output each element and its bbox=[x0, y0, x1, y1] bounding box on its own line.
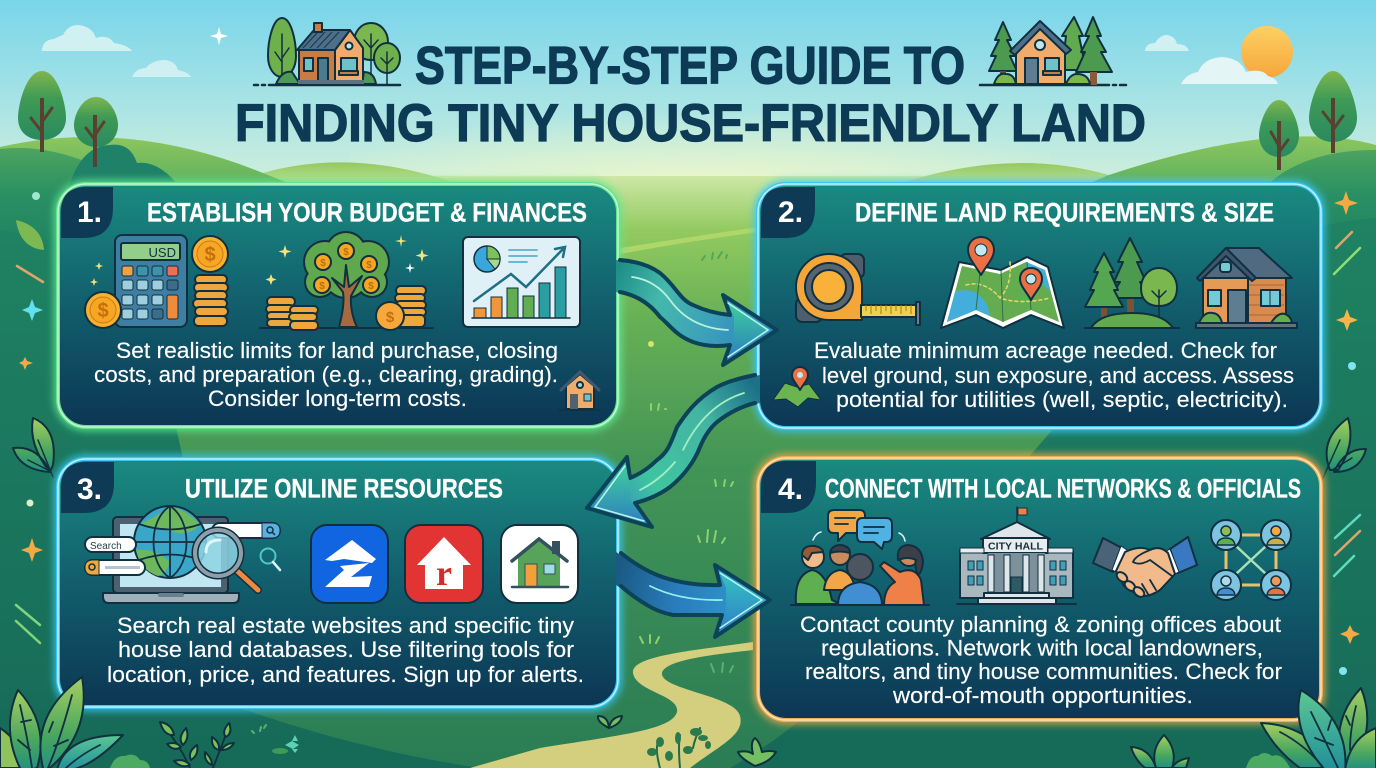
body text 2: Evaluate minimum acreage needed. Check for bbox=[814, 338, 1278, 363]
step number 1: 1. bbox=[77, 196, 102, 229]
body text 4 bbox=[800, 612, 1283, 708]
foliage: bottom sprigs bbox=[160, 722, 299, 768]
step number 2 bbox=[761, 187, 815, 238]
body text 3: house land databases. Use filtering tools for bbox=[118, 637, 575, 662]
grass tufts bbox=[640, 252, 733, 672]
icon: trees bbox=[1085, 238, 1179, 328]
icon: city hall: CITY HALL bbox=[988, 540, 1044, 552]
sun bbox=[1241, 26, 1293, 78]
icon: calculator and coins: $ bbox=[97, 300, 109, 322]
icon: handshake bbox=[1093, 537, 1197, 599]
icon: map with pins bbox=[941, 237, 1064, 328]
icon: city hall bbox=[957, 507, 1076, 604]
heading 3: UTILIZE ONLINE RESOURCES bbox=[185, 474, 503, 504]
icon: laptop search with globe bbox=[85, 506, 280, 603]
arrow: step 1 to step 2 bbox=[616, 260, 777, 365]
icon: laptop search with globe: Search bbox=[90, 541, 122, 552]
title: STEP-BY-STEP GUIDE TO bbox=[415, 36, 965, 96]
step number 1 bbox=[61, 187, 113, 238]
foliage: bottom centre-right plant and bush bbox=[1131, 735, 1290, 768]
arrow: step 3 to step 4 bbox=[616, 552, 770, 637]
icon: Zillow-style blue tile bbox=[311, 525, 388, 603]
panel 4: local networks bbox=[758, 458, 1321, 720]
side decorations left bbox=[13, 192, 54, 643]
icon: money tree: $ bbox=[343, 247, 349, 258]
heading 1: ESTABLISH YOUR BUDGET & FINANCES bbox=[147, 198, 587, 228]
title: FINDING TINY HOUSE-FRIENDLY LAND bbox=[235, 94, 1146, 153]
background: sky bbox=[0, 0, 1376, 190]
step number 3 bbox=[61, 462, 114, 513]
foliage: sprouts near path bbox=[598, 716, 776, 768]
icon: small house bbox=[559, 372, 600, 410]
foliage: bottom left leaves bbox=[0, 677, 150, 768]
body text 3 bbox=[107, 613, 584, 687]
title icon: tiny house with pines, right bbox=[980, 17, 1126, 85]
icon: calculator and coins bbox=[85, 235, 228, 328]
sparkle bbox=[210, 27, 228, 45]
title bbox=[235, 36, 1146, 153]
icon: calculator and coins: $ bbox=[204, 244, 216, 266]
step number 4 bbox=[761, 461, 816, 513]
icon: tape measure bbox=[796, 254, 920, 325]
winding path bbox=[470, 642, 753, 768]
title icon: tiny house with trees, left bbox=[254, 18, 400, 85]
panel 3: online resources bbox=[58, 459, 618, 707]
body text 2: potential for utilities (well, septic, electricity). bbox=[836, 387, 1288, 412]
icon: money tree: $ bbox=[366, 260, 372, 271]
left trees bbox=[18, 71, 118, 167]
icon: money tree: $ bbox=[320, 258, 326, 269]
body text 2: level ground, sun exposure, and access. Assess bbox=[822, 363, 1294, 388]
right trees bbox=[1259, 71, 1357, 170]
foliage: bottom right leaves bbox=[1261, 688, 1376, 768]
step number 4: 4. bbox=[778, 473, 803, 506]
cloud bbox=[132, 60, 191, 77]
icon: red tile with r house bbox=[405, 525, 483, 603]
body text 1 bbox=[94, 338, 558, 411]
icon: small pin on land bbox=[773, 367, 821, 407]
body text 4: realtors, and tiny house communities. Check for bbox=[805, 659, 1283, 684]
body text 1: Consider long-term costs. bbox=[208, 386, 467, 411]
heading 2: DEFINE LAND REQUIREMENTS & SIZE bbox=[855, 198, 1274, 228]
icon: white tile with green house bbox=[501, 525, 578, 603]
body text 4: Contact county planning & zoning offices about bbox=[800, 612, 1282, 637]
icon: money tree bbox=[260, 233, 433, 330]
panel 1: budget bbox=[58, 184, 618, 427]
body text 4: word-of-mouth opportunities. bbox=[892, 683, 1193, 708]
icon: calculator and coins: USD bbox=[149, 245, 176, 260]
icon: red tile with r house: r bbox=[436, 553, 452, 593]
body text 2 bbox=[814, 338, 1294, 412]
body text 3: Search real estate websites and specific tiny bbox=[117, 613, 575, 638]
cloud bbox=[1145, 35, 1189, 51]
step number 2: 2. bbox=[778, 196, 803, 229]
cloud bbox=[1181, 57, 1278, 84]
icon: money tree: $ bbox=[319, 281, 325, 292]
icon: people talking bbox=[791, 510, 929, 605]
body text 4: regulations. Network with local landowners, bbox=[821, 636, 1263, 660]
body text 3: location, price, and features. Sign up for alerts. bbox=[107, 662, 584, 687]
body text 1: costs, and preparation (e.g., clearing, grading). bbox=[94, 362, 558, 387]
arrow: step 2 to step 3 bbox=[587, 375, 760, 527]
icon: money tree: $ bbox=[368, 281, 374, 292]
icon: growth chart card bbox=[463, 237, 580, 327]
panel 2: land requirements bbox=[758, 184, 1321, 428]
icon: money tree: $ bbox=[386, 309, 395, 326]
icon: network of people bbox=[1211, 520, 1291, 600]
icon: house bbox=[1196, 248, 1297, 328]
cloud bbox=[42, 25, 132, 51]
side decorations right bbox=[1323, 191, 1366, 675]
step number 3: 3. bbox=[77, 473, 102, 506]
body text 1: Set realistic limits for land purchase, closing bbox=[116, 338, 558, 363]
